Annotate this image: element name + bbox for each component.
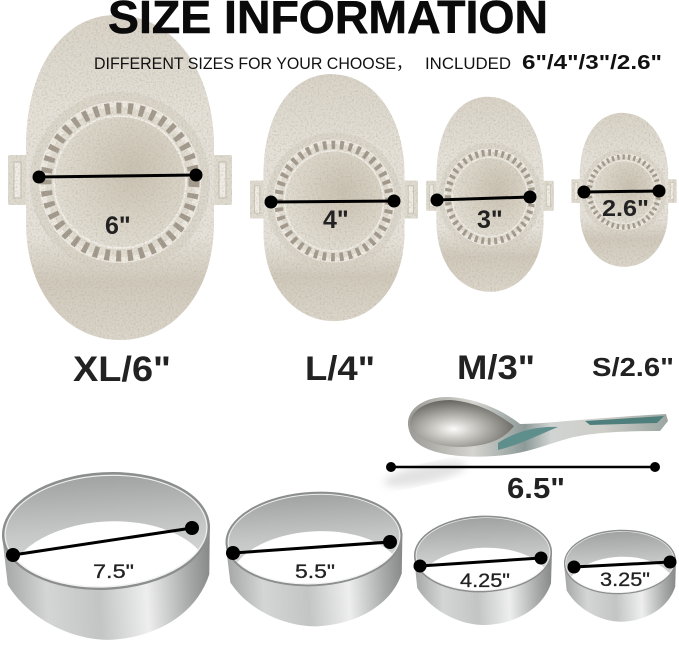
cutter: XL bbox=[0, 468, 216, 645]
cutter size labels: 3.25" bbox=[600, 570, 650, 591]
cutter size labels: 4.25" bbox=[460, 571, 510, 592]
size captions: S/2.6" bbox=[592, 352, 674, 382]
measure: L cutter bbox=[226, 535, 397, 560]
mold: XL bbox=[8, 15, 232, 340]
measure: spoon length bbox=[386, 462, 660, 472]
mold size labels: 3" bbox=[477, 206, 503, 234]
measure: L mold diameter bbox=[264, 194, 400, 208]
subtitle: INCLUDED bbox=[425, 54, 511, 73]
subtitle: DIFFERENT SIZES FOR YOUR CHOOSE， bbox=[94, 54, 412, 73]
cutter: L bbox=[223, 488, 407, 631]
cutter size labels: 7.5" bbox=[93, 562, 134, 583]
mold: M bbox=[426, 97, 554, 292]
measure: XL cutter bbox=[6, 521, 199, 562]
size captions bbox=[73, 349, 674, 389]
size captions: M/3" bbox=[457, 349, 535, 387]
cutter: M bbox=[413, 514, 554, 627]
cutter: S bbox=[563, 528, 678, 624]
cutter size labels: 5.5" bbox=[295, 562, 335, 583]
icon: spoon bbox=[382, 397, 668, 492]
mold size labels: 2.6" bbox=[602, 195, 649, 221]
measure: M mold diameter bbox=[430, 190, 536, 206]
subtitle bbox=[94, 52, 662, 74]
size captions: L/4" bbox=[305, 350, 375, 388]
size captions: XL/6" bbox=[73, 350, 171, 389]
measure: S cutter bbox=[568, 556, 676, 574]
measure: S mold diameter bbox=[578, 184, 666, 198]
subtitle: 6"/4"/3"/2.6" bbox=[522, 52, 662, 74]
mold: S bbox=[571, 113, 677, 267]
mold: L bbox=[250, 74, 418, 321]
mold size labels bbox=[105, 195, 649, 240]
mold size labels: 6" bbox=[105, 212, 131, 240]
measure: M cutter bbox=[414, 552, 548, 572]
cutter size labels bbox=[93, 562, 650, 592]
mold size labels: 4" bbox=[323, 206, 349, 234]
spoon length label: 6.5" bbox=[507, 473, 565, 505]
measure: XL mold diameter bbox=[32, 168, 202, 184]
